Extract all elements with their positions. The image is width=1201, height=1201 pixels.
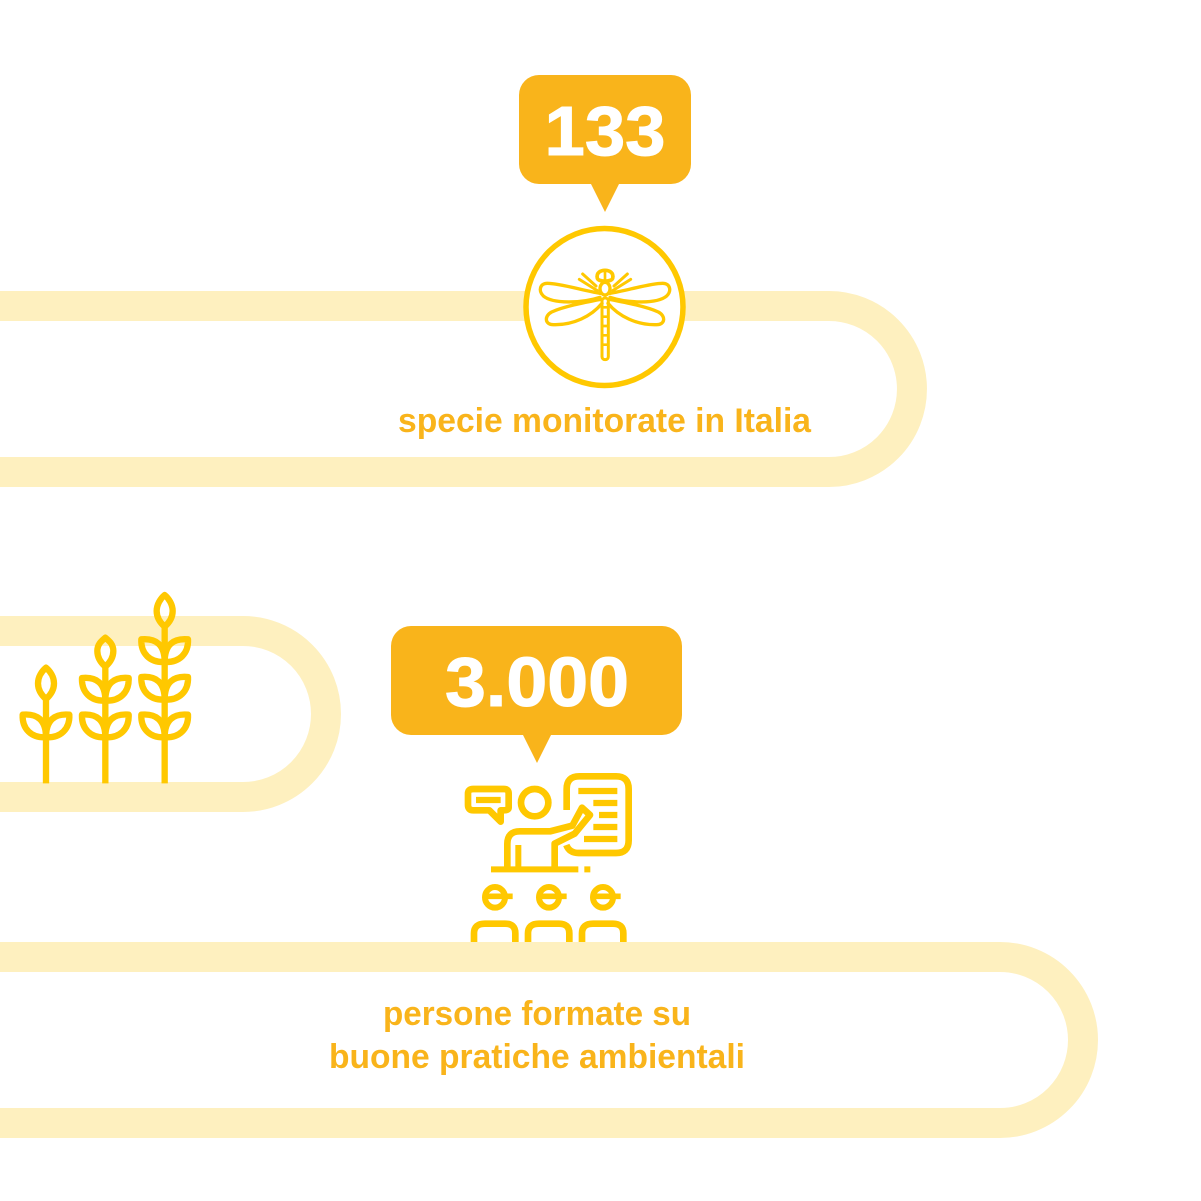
label: persone formate: [329, 995, 745, 1076]
icon: dragonfly in circle: [526, 228, 683, 386]
label: specie monitorate: specie monitorate in Italia: [398, 402, 812, 440]
callout: 3.000: [391, 626, 682, 763]
callout: 133: [519, 75, 691, 212]
track: middle path: [0, 631, 326, 797]
track: bottom path: [0, 957, 1083, 1123]
label: persone formate: buone pratiche ambientali: [329, 1038, 745, 1076]
icon: students and teacher: [468, 776, 629, 942]
label: persone formate: persone formate su: [383, 995, 691, 1033]
callout: 3.000: 3.000: [445, 643, 629, 721]
callout: 133: 133: [544, 92, 666, 170]
track: top path: [0, 306, 912, 472]
icon: wheat stalks: [23, 595, 188, 783]
